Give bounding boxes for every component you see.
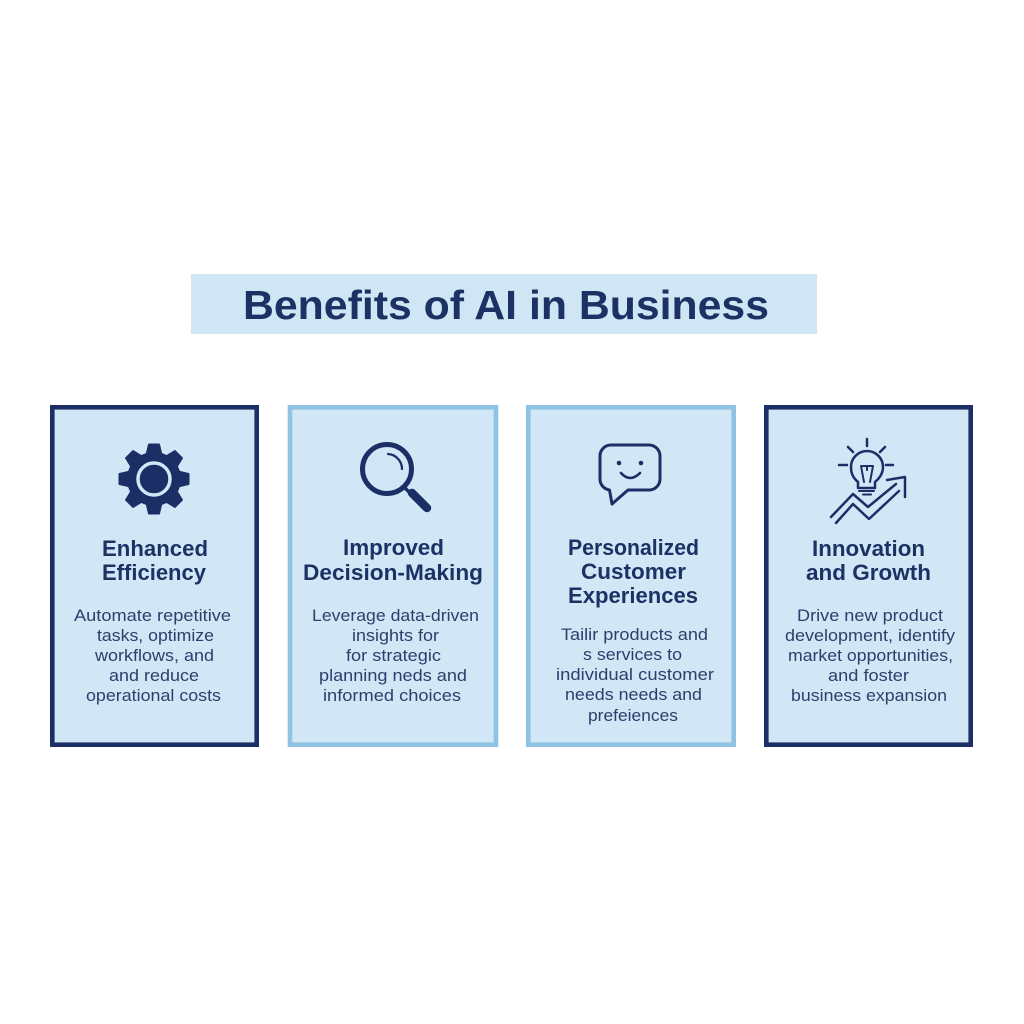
text: innovation and growth description: Drive new product [797,607,943,625]
text: innovation and growth description: business expansion [791,687,947,705]
text: improved decision-making description: insights for [352,627,440,645]
icon: magnifying glass [362,444,427,508]
heading: personalized customer experiences: Experiences [568,583,698,608]
heading: enhanced efficiency: Enhanced [102,536,208,561]
text: enhanced efficiency description: and reduce [109,667,199,685]
text: innovation and growth description: market opportunities, [788,647,953,665]
heading: personalized customer experiences: Customer [581,559,686,584]
heading: improved decision-making [303,535,483,585]
text: improved decision-making description: planning neds and [319,667,467,685]
text: personalized customer experiences description: individual customer [556,666,715,684]
text: personalized customer experiences description [556,626,715,725]
heading: improved decision-making: Decision-Making [303,560,483,585]
panel: personalized customer experiences [528,407,734,745]
text: enhanced efficiency description: operational costs [86,687,221,705]
icon: smiling chat bubble [600,445,660,504]
text: personalized customer experiences description: prefeiences [588,707,678,725]
panel: improved decision-making [290,407,496,745]
heading: innovation and growth: and Growth [806,560,931,585]
title banner [191,274,817,334]
text: innovation and growth description [785,607,956,705]
text: enhanced efficiency description: tasks, optimize [97,627,214,645]
text: improved decision-making description: informed choices [323,687,461,705]
title: Benefits of AI in Business [243,282,769,328]
text: innovation and growth description: development, identify [785,627,956,645]
panel: innovation and growth [766,407,971,745]
text: improved decision-making description: for strategic [346,647,441,665]
icon: light bulb with growth arrow [831,439,905,523]
text: enhanced efficiency description: Automate repetitive [74,607,231,625]
heading: personalized customer experiences: Personalized [568,535,699,560]
heading: enhanced efficiency: Efficiency [102,560,207,585]
heading: enhanced efficiency [102,536,208,585]
heading: innovation and growth [806,536,931,585]
text: personalized customer experiences description: Tailir products and [561,626,708,644]
text: improved decision-making description: Leverage data-driven [312,607,479,625]
text: innovation and growth description: and foster [828,667,910,685]
text: enhanced efficiency description [74,607,231,705]
heading: personalized customer experiences [568,535,699,608]
text: personalized customer experiences description: s services to [583,646,682,664]
text: enhanced efficiency description: workflows, and [94,647,214,665]
heading: improved decision-making: Improved [343,535,444,560]
heading: innovation and growth: Innovation [812,536,925,561]
text: improved decision-making description [312,607,479,705]
text: personalized customer experiences description: needs needs and [565,686,702,704]
icon: gear [120,444,188,514]
panel: enhanced efficiency [52,407,257,745]
